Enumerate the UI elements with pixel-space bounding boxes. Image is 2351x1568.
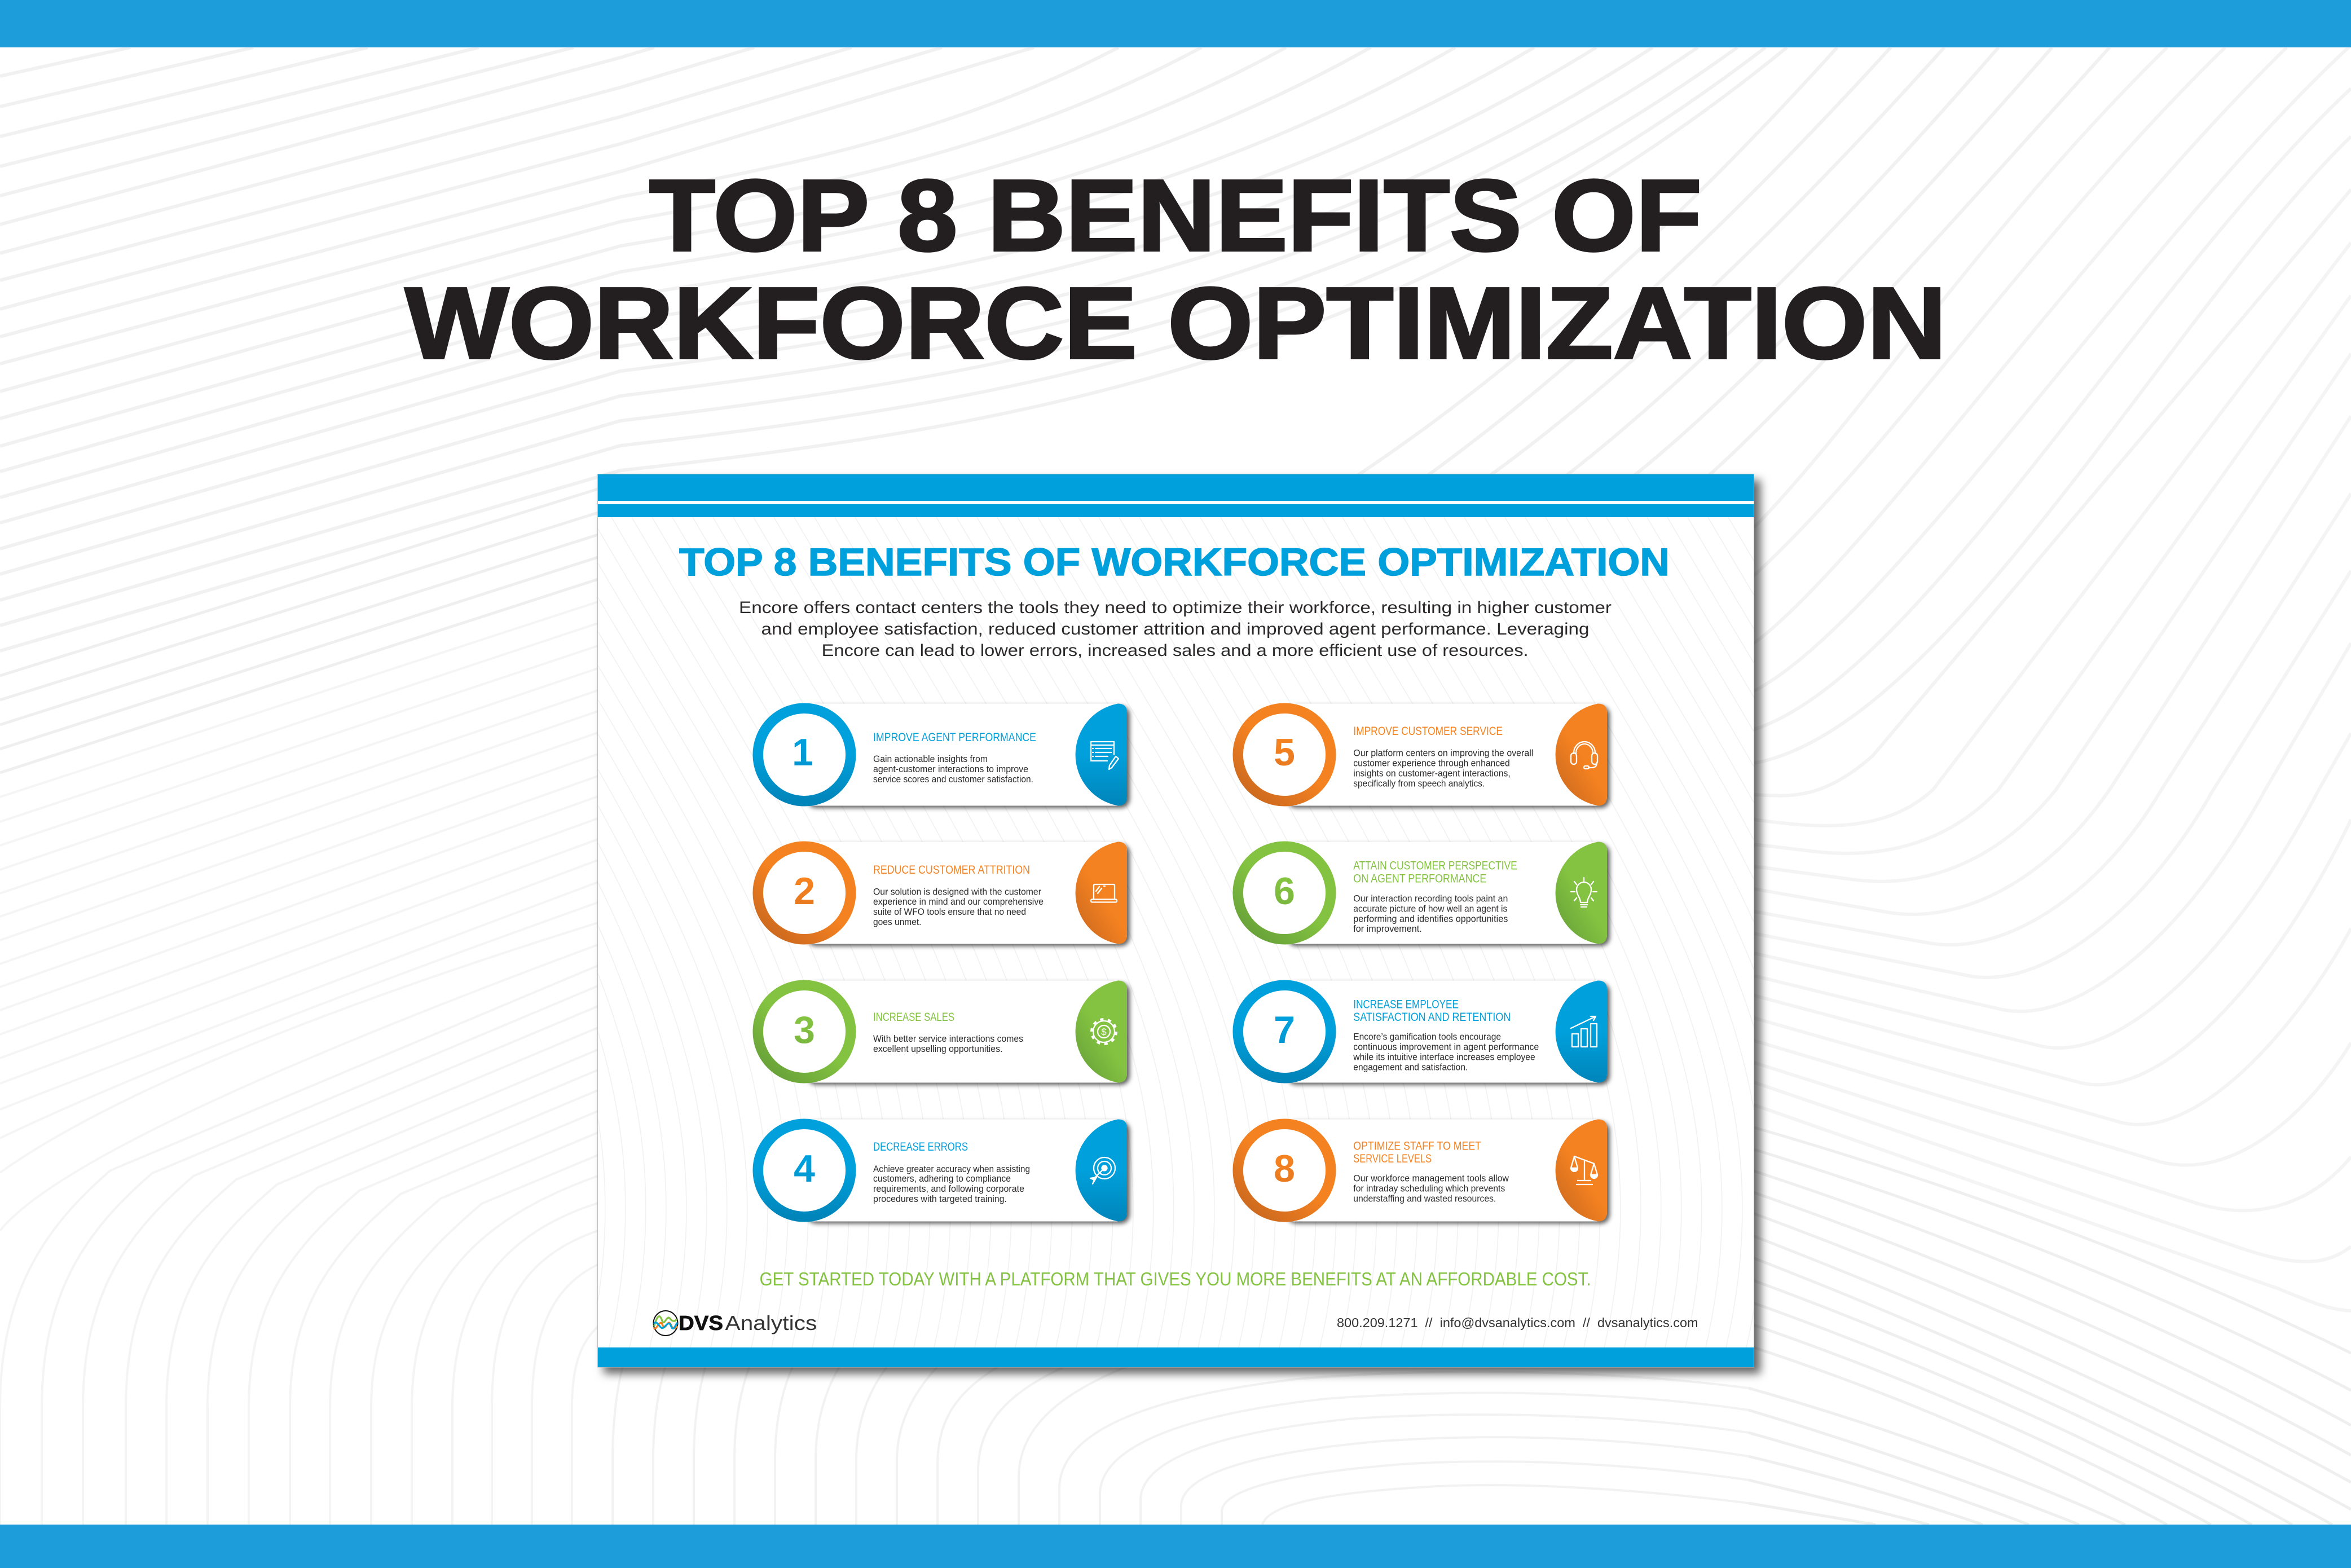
logo: DVS Analytics: DVS — [679, 1311, 723, 1334]
card 3: increase sales: excellent upselling opportunities. — [873, 1043, 1003, 1054]
top bar — [0, 0, 2351, 47]
panel title: TOP 8 BENEFITS OF WORKFORCE OPTIMIZATION — [679, 540, 1670, 584]
card 7: increase employee satisfaction: Encore’s gamification tools encourage — [1353, 1032, 1501, 1042]
card 7: increase employee satisfaction: engagement and satisfaction. — [1353, 1062, 1468, 1072]
icon: rising bar chart — [1571, 1016, 1597, 1047]
card 4: decrease errors: procedures with targeted training. — [873, 1193, 1007, 1204]
main title — [405, 159, 1947, 380]
icon: logo waves — [653, 1311, 678, 1336]
card 7: increase employee satisfaction: INCREASE EMPLOYEE — [1353, 997, 1459, 1011]
card 5: improve customer service: specifically from speech analytics. — [1353, 778, 1485, 789]
logo: DVS Analytics: Analytics — [725, 1311, 817, 1334]
icon: target and arrow — [1090, 1157, 1115, 1184]
icon: dollar gear: $ — [1101, 1027, 1107, 1037]
card 6: attain customer perspective: Our interaction recording tools paint an — [1353, 893, 1508, 904]
intro paragraph: Encore can lead to lower errors, increased sales and a more efficient use of resources. — [822, 641, 1529, 660]
card 4: decrease errors: Achieve greater accuracy when assisting — [873, 1164, 1030, 1174]
card 8: optimize staff: OPTIMIZE STAFF TO MEET — [1353, 1139, 1481, 1152]
card 2: reduce customer attrition — [758, 842, 1127, 944]
intro paragraph — [739, 598, 1612, 660]
card 1: improve agent performance: Gain actionable insights from — [873, 754, 988, 764]
card 5: improve customer service — [1238, 704, 1607, 805]
card 3: increase sales: 3 — [794, 1008, 815, 1051]
panel: flyer document — [597, 473, 1767, 1381]
icon: laptop — [1091, 884, 1117, 902]
bottom bar — [0, 1525, 2351, 1568]
card 5: improve customer service: customer experience through enhanced — [1353, 758, 1510, 769]
card 6: attain customer perspective — [1238, 842, 1607, 944]
icon: dollar gear — [1092, 1020, 1116, 1043]
panel header bands — [598, 474, 1754, 517]
panel footer band — [598, 1347, 1754, 1367]
logo: DVS Analytics — [653, 1311, 817, 1336]
panel sheet with shadow — [598, 474, 1754, 1367]
card 2: reduce customer attrition: REDUCE CUSTOMER ATTRITION — [873, 863, 1030, 877]
card 5: improve customer service: insights on customer-agent interactions, — [1353, 768, 1511, 779]
card 1: improve agent performance: service scores and customer satisfaction. — [873, 774, 1033, 785]
card 1: improve agent performance: IMPROVE AGENT PERFORMANCE — [873, 730, 1036, 744]
card 4: decrease errors: DECREASE ERRORS — [873, 1140, 968, 1153]
card 7: increase employee satisfaction: continuous improvement in agent performance — [1353, 1042, 1539, 1052]
card 2: reduce customer attrition: suite of WFO tools ensure that no need — [873, 906, 1026, 917]
icon: headset — [1571, 742, 1597, 769]
card 4: decrease errors: 4 — [794, 1147, 815, 1190]
card 6: attain customer perspective: accurate picture of how well an agent is — [1353, 903, 1507, 914]
card 7: increase employee satisfaction: SATISFACTION AND RETENTION — [1353, 1010, 1511, 1024]
icon: document and pencil — [1091, 742, 1119, 769]
card 8: optimize staff: for intraday scheduling which prevents — [1353, 1183, 1505, 1193]
icon: light bulb — [1571, 878, 1597, 907]
card 6: attain customer perspective: ON AGENT PERFORMANCE — [1353, 871, 1486, 885]
contact details: 800.209.1271 // info@dvsanalytics.com // dvsanalytics.com — [1337, 1315, 1698, 1330]
intro paragraph: Encore offers contact centers the tools they need to optimize their workforce, resulting in higher customer — [739, 598, 1612, 617]
card 3: increase sales: INCREASE SALES — [873, 1010, 954, 1024]
card 8: optimize staff: understaffing and wasted resources. — [1353, 1193, 1496, 1204]
card 5: improve customer service: Our platform centers on improving the overall — [1353, 748, 1533, 759]
call to action: GET STARTED TODAY WITH A PLATFORM THAT GIVES YOU MORE BENEFITS AT AN AFFORDABLE COST. — [760, 1269, 1591, 1289]
card 8: optimize staff: Our workforce management tools allow — [1353, 1173, 1509, 1184]
card 3: increase sales — [758, 980, 1127, 1083]
card 1: improve agent performance: 1 — [792, 731, 813, 774]
card 3: increase sales: With better service interactions comes — [873, 1033, 1023, 1044]
card 7: increase employee satisfaction: 7 — [1274, 1008, 1295, 1051]
main title: WORKFORCE OPTIMIZATION — [405, 267, 1947, 380]
card 7: increase employee satisfaction: while its intuitive interface increases employee — [1353, 1052, 1535, 1063]
card 8: optimize staff: SERVICE LEVELS — [1353, 1152, 1432, 1165]
card 2: reduce customer attrition: 2 — [794, 870, 815, 913]
card 2: reduce customer attrition: Our solution is designed with the customer — [873, 887, 1041, 897]
card 4: decrease errors: requirements, and following corporate — [873, 1183, 1024, 1194]
card 2: reduce customer attrition: goes unmet. — [873, 917, 922, 927]
card 8: optimize staff: 8 — [1274, 1147, 1295, 1190]
card 1: improve agent performance: agent-customer interactions to improve — [873, 764, 1028, 774]
card 6: attain customer perspective: performing and identifies opportunities — [1353, 913, 1508, 924]
card 6: attain customer perspective: 6 — [1274, 870, 1295, 913]
card 5: improve customer service: IMPROVE CUSTOMER SERVICE — [1353, 724, 1503, 738]
card 6: attain customer perspective: for improvement. — [1353, 923, 1422, 934]
main title: TOP 8 BENEFITS OF — [649, 159, 1702, 272]
card 8: optimize staff — [1238, 1119, 1607, 1222]
card 5: improve customer service: 5 — [1274, 731, 1295, 774]
intro paragraph: and employee satisfaction, reduced customer attrition and improved agent performance. Leveraging — [761, 620, 1590, 638]
card 6: attain customer perspective: ATTAIN CUSTOMER PERSPECTIVE — [1353, 858, 1517, 872]
card 7: increase employee satisfaction — [1238, 980, 1607, 1083]
card 4: decrease errors: customers, adhering to compliance — [873, 1173, 1011, 1184]
icon: balance scale — [1571, 1156, 1597, 1184]
card 2: reduce customer attrition: experience in mind and our comprehensive — [873, 896, 1044, 907]
card 1: improve agent performance — [758, 704, 1127, 805]
card 4: decrease errors — [758, 1119, 1127, 1222]
